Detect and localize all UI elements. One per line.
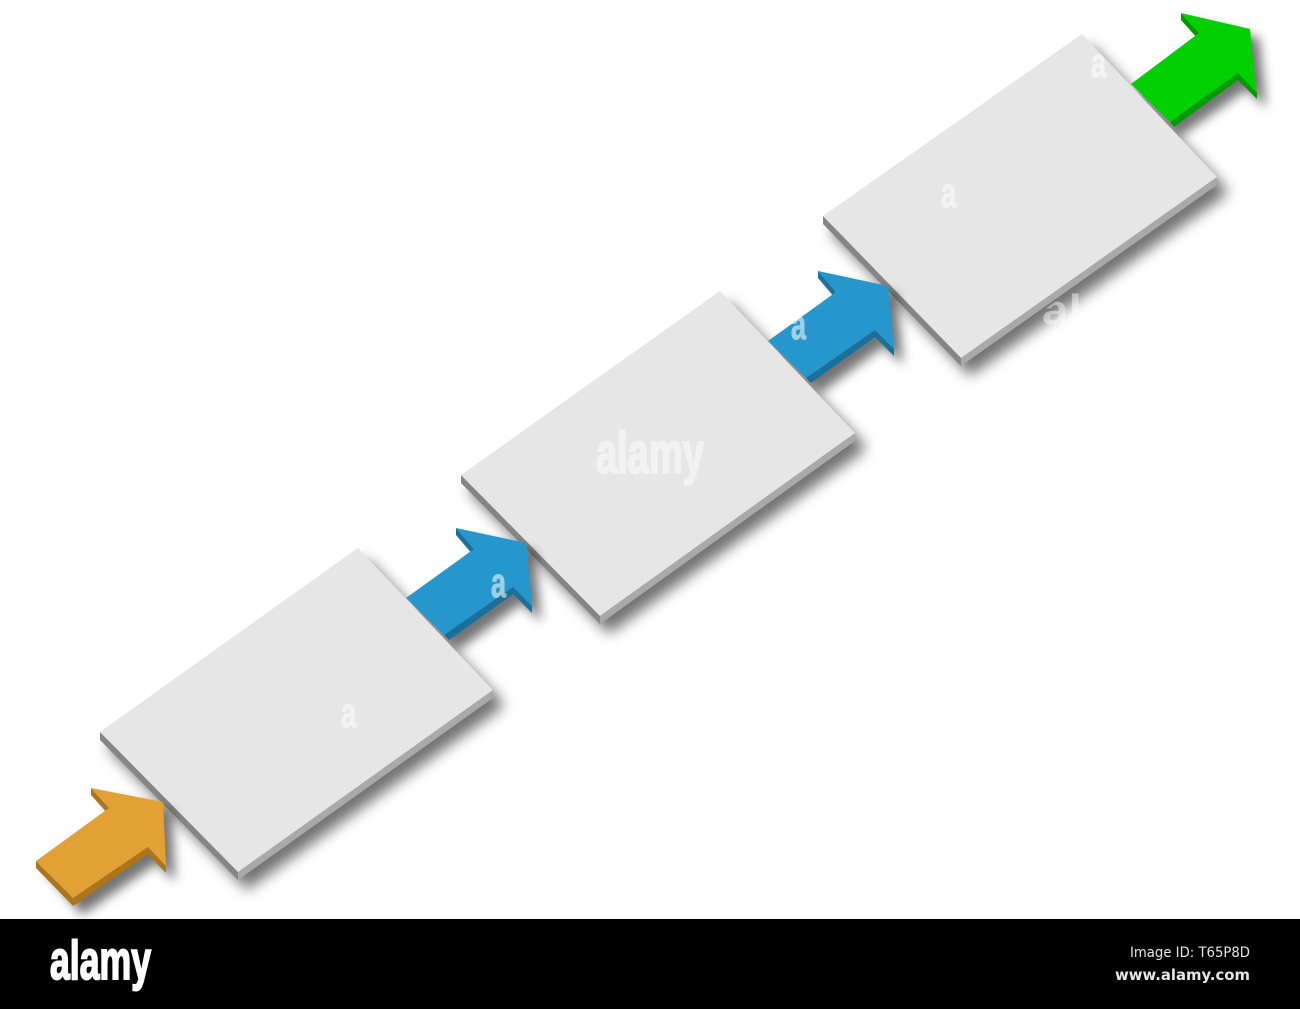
watermark: letter marks: [341, 39, 1106, 736]
website: www.alamy.com: [1115, 966, 1250, 984]
shadow: green arrow: [1140, 22, 1266, 137]
watermark: letter marks: a: [491, 559, 506, 606]
watermark: letter marks: a: [941, 169, 956, 216]
footer logo: alamy: [50, 929, 151, 991]
shadow: blue arrow two: [777, 280, 903, 394]
watermark: center logo: alamy: [596, 421, 704, 486]
arrow: orange input: [36, 788, 166, 906]
arrow: green output: [1131, 13, 1257, 127]
shadow: blue arrow one: [415, 537, 541, 651]
watermark: letter marks: a: [341, 689, 356, 736]
image id: Image ID: T65P8D: [1130, 945, 1250, 961]
panel: first step: [100, 548, 502, 890]
panel: third step: [823, 34, 1226, 376]
arrow: blue connector one: [406, 528, 532, 640]
panel: second step: [461, 291, 864, 634]
watermark: partial logo over panel edge: al: [1042, 286, 1082, 333]
watermark: letter marks: a: [791, 301, 806, 348]
shadow: orange arrow: [45, 797, 175, 915]
footer bar: [0, 919, 1300, 1009]
arrow: blue connector two: [768, 271, 894, 383]
watermark: letter marks: a: [1091, 39, 1106, 86]
